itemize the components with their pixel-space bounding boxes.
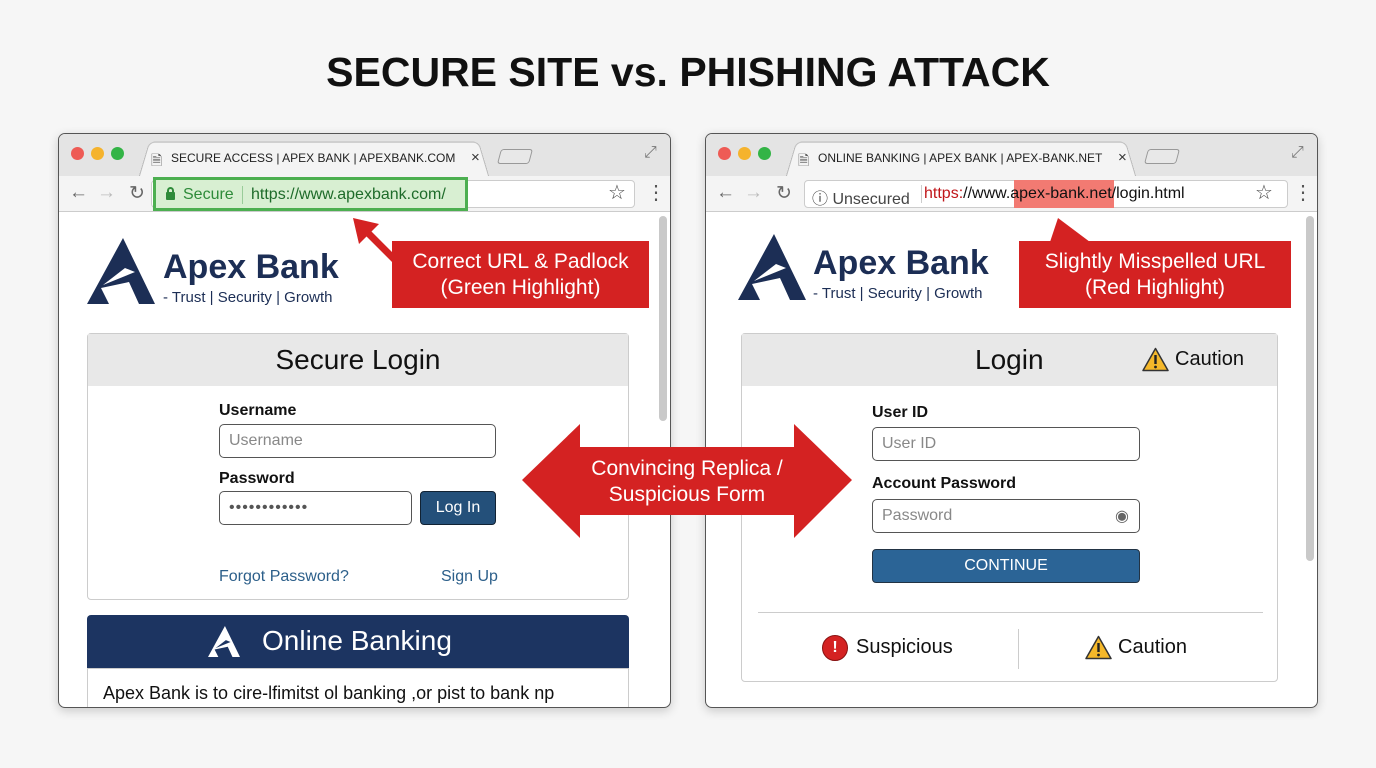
phishing login panel [741,333,1278,682]
secure login panel: •••••••••••• [229,499,308,516]
panel: secure browser window: ← [69,182,88,203]
phishing login panel: Account Password [872,475,1016,492]
arrow to URL [353,218,392,262]
panel: phishing browser window: ⋮ [1293,182,1313,204]
callout: correct URL: (Green Highlight) [441,276,600,298]
caution indicator: Caution [1118,636,1187,658]
panel: phishing browser window: × [1118,149,1127,166]
callout: misspelled URL: Slightly Misspelled URL [1045,250,1265,272]
panel: phishing browser window: ↻ [776,183,792,204]
panel: phishing browser window: ← [716,182,735,203]
green highlighted URL [153,177,468,211]
green highlighted URL: Secure [183,186,234,203]
phishing login panel: Password [882,507,952,524]
panel: phishing browser window: ☆ [1255,182,1273,204]
phishing login panel: ◉ [1115,508,1129,525]
callout: misspelled URL: (Red Highlight) [1085,276,1225,298]
green highlighted URL: https://www.apexbank.com/ [251,186,446,203]
panel: secure browser window: SECURE ACCESS | APEX BANK | APEXBANK.COM [171,151,455,165]
logo [738,234,989,302]
secure login panel: Username [219,402,296,419]
secure login panel: Secure Login [275,344,440,375]
logo: Apex Bank [813,244,989,282]
caution indicator [1085,636,1187,660]
panel: phishing browser window: ⤢ [1291,144,1304,161]
suspicious indicator: ! [832,639,838,656]
arrow to URL [1050,218,1088,241]
caution icon [1142,348,1244,372]
double arrow: convincing replica: Convincing Replica / [591,457,783,480]
red highlighted URL: https://www.apex-bank.net/login.html [924,185,1185,202]
secure login panel: Sign Up [441,568,498,585]
panel: secure browser window: ☆ [608,182,626,204]
tab title: 🗎 [798,152,809,168]
callout: misspelled URL [1019,241,1291,308]
tab title: 🗎 [151,152,162,168]
panel: phishing browser window: → [744,182,763,203]
logo: - Trust | Security | Growth [813,285,982,302]
secure login panel: Log In [436,499,480,516]
caution icon: Caution [1175,348,1244,370]
panel: phishing browser window: ONLINE BANKING | APEX BANK | APEX-BANK.NET [818,151,1102,165]
red highlighted URL [812,180,1185,208]
panel: secure browser window: Apex Bank is to cire-lfimitst ol banking ,or pist to bank np [103,683,554,703]
suspicious indicator: Suspicious [856,636,953,658]
secure login panel: Username [229,432,303,449]
double arrow: convincing replica: Suspicious Form [609,483,765,506]
logo [87,238,339,306]
callout: correct URL [392,241,649,308]
phishing login panel: Login [975,344,1044,375]
panel: secure browser window: → [97,182,116,203]
phishing login panel: User ID [872,404,928,421]
secure login panel: Forgot Password? [219,568,349,585]
panel: secure browser window: ↻ [129,183,145,204]
panel: secure browser window: ⤢ [644,144,657,161]
panel: secure browser window [58,133,671,708]
phishing login panel: CONTINUE [964,557,1048,574]
phishing login panel: User ID [882,435,936,452]
panel: secure browser window: × [471,149,480,166]
online banking bar: Online Banking [262,625,452,656]
logo: - Trust | Security | Growth [163,289,332,306]
secure login panel: Password [219,470,295,487]
panel: secure browser window: ⋮ [646,182,666,204]
logo: Apex Bank [163,248,339,286]
online banking bar [87,615,629,668]
title: SECURE SITE vs. PHISHING ATTACK [326,49,1050,95]
callout: correct URL: Correct URL & Padlock [412,250,629,272]
suspicious indicator [822,635,953,661]
red highlighted URL: ⓘ Unsecured [812,191,910,208]
double arrow: convincing replica [522,424,852,538]
secure login panel [87,333,629,600]
panel: phishing browser window [705,133,1318,708]
